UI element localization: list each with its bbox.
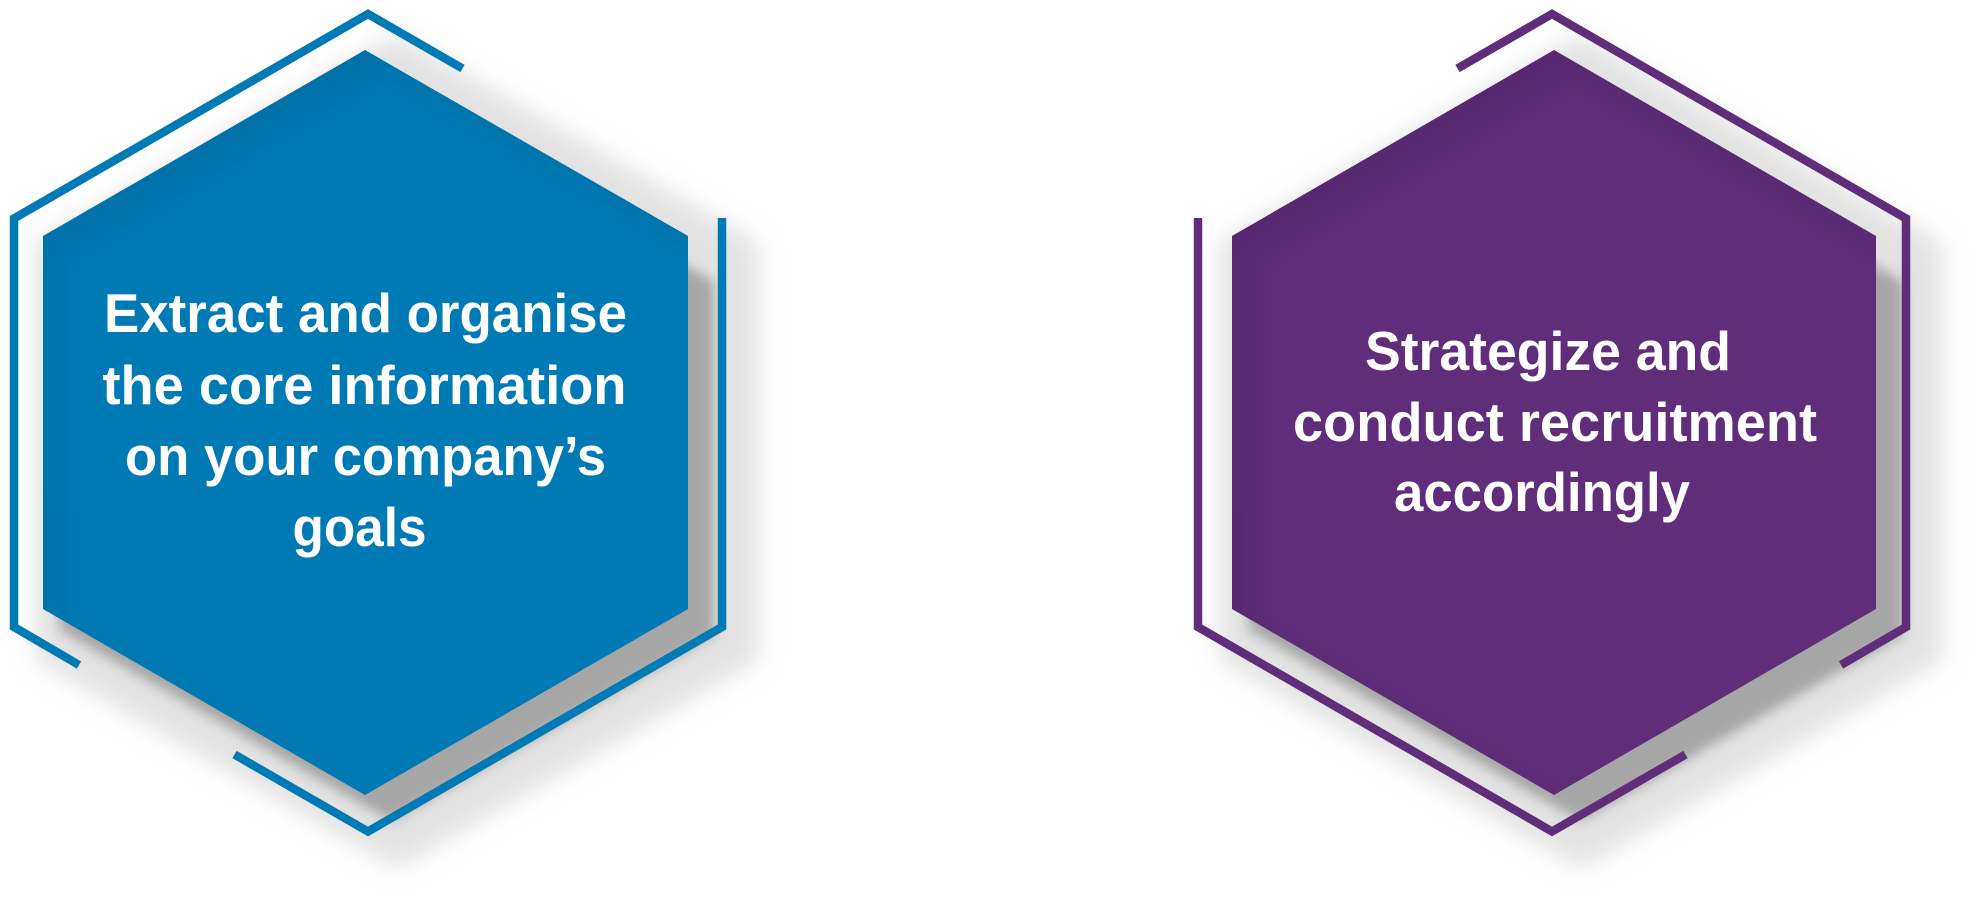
text: extract and organise: on your company’s [125,426,606,487]
dark drop shadow [1249,80,1903,821]
hexagon outline upper bracket [1458,14,1906,665]
dark drop shadow [60,80,714,821]
panel: extract and organise hexagon [0,0,780,880]
hexagon outline upper bracket [14,14,462,665]
inner shading [1232,50,1560,236]
text: strategize and conduct recruitment: accordingly [1394,462,1691,523]
soft outer shadow [1220,35,1942,868]
hexagon outline lower bracket [234,218,722,832]
panel: strategize and conduct recruitment hexagon [1190,0,1970,880]
text: extract and organise: the core information [102,355,626,416]
text: extract and organise: Extract and organise [104,283,627,344]
text: strategize and conduct recruitment: Strategize and [1365,321,1731,382]
solid purple hexagon [1232,50,1876,795]
text: strategize and conduct recruitment: conduct recruitment [1293,392,1817,453]
hexagon outline lower bracket [1198,218,1686,832]
solid blue hexagon [43,50,688,795]
inner shading [43,50,688,618]
text: extract and organise: goals [292,497,426,558]
text: strategize and conduct recruitment [1293,321,1817,523]
text: extract and organise [102,283,627,558]
soft outer shadow [36,35,758,868]
